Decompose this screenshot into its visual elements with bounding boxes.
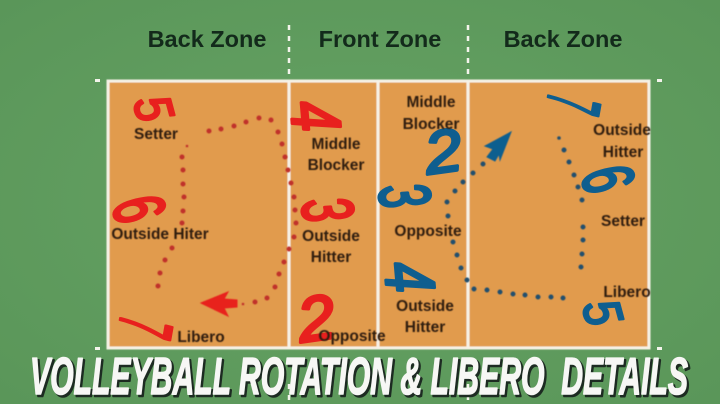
blue arrow	[485, 132, 511, 161]
player labels: right team: Hitter	[405, 319, 445, 336]
player labels: right team	[394, 94, 651, 336]
player labels: left team: Outside	[302, 228, 360, 245]
player labels: left team: Outside Hiter	[111, 226, 209, 243]
red numbers	[96, 89, 368, 356]
blue numbers: 7	[531, 89, 616, 120]
red numbers: 6	[96, 183, 181, 234]
red numbers: 3	[286, 191, 368, 228]
volleyball court	[108, 81, 649, 348]
zone headings: Front Zone	[319, 26, 441, 52]
player labels: right team: Libero	[603, 284, 651, 301]
player labels: left team: Hitter	[311, 249, 351, 266]
red arrow	[201, 292, 237, 316]
blue numbers: 2	[419, 116, 466, 188]
blue numbers: 4	[369, 259, 448, 295]
player labels: right team: Hitter	[603, 144, 643, 161]
blue numbers: 5	[570, 293, 634, 332]
blue numbers	[363, 89, 650, 332]
player labels: left team: Libero	[177, 329, 225, 346]
blue rotation path	[445, 136, 585, 300]
zone headings: Back Zone	[148, 26, 266, 52]
red numbers: 2	[292, 281, 339, 356]
player labels: left team: Blocker	[308, 157, 364, 174]
player labels: right team: Middle	[406, 94, 456, 111]
red numbers: 5	[121, 89, 185, 128]
red rotation path	[156, 116, 298, 305]
zone headings: Back Zone	[504, 26, 622, 52]
blue numbers: 3	[363, 177, 445, 214]
player labels: right team: Outside	[593, 122, 651, 139]
blue numbers: 6	[565, 153, 650, 204]
player labels: left team: Opposite	[318, 328, 386, 345]
player labels: right team: Blocker	[403, 116, 459, 133]
zone headings	[148, 26, 622, 52]
player labels: right team: Setter	[601, 213, 645, 230]
red numbers: 7	[102, 311, 188, 343]
player labels: left team: Middle	[311, 136, 361, 153]
player labels: right team: Opposite	[394, 223, 462, 240]
red numbers: 4	[275, 98, 354, 134]
player labels: left team: Setter	[134, 126, 178, 143]
player labels: right team: Outside	[396, 298, 454, 315]
player labels: left team	[111, 126, 386, 346]
